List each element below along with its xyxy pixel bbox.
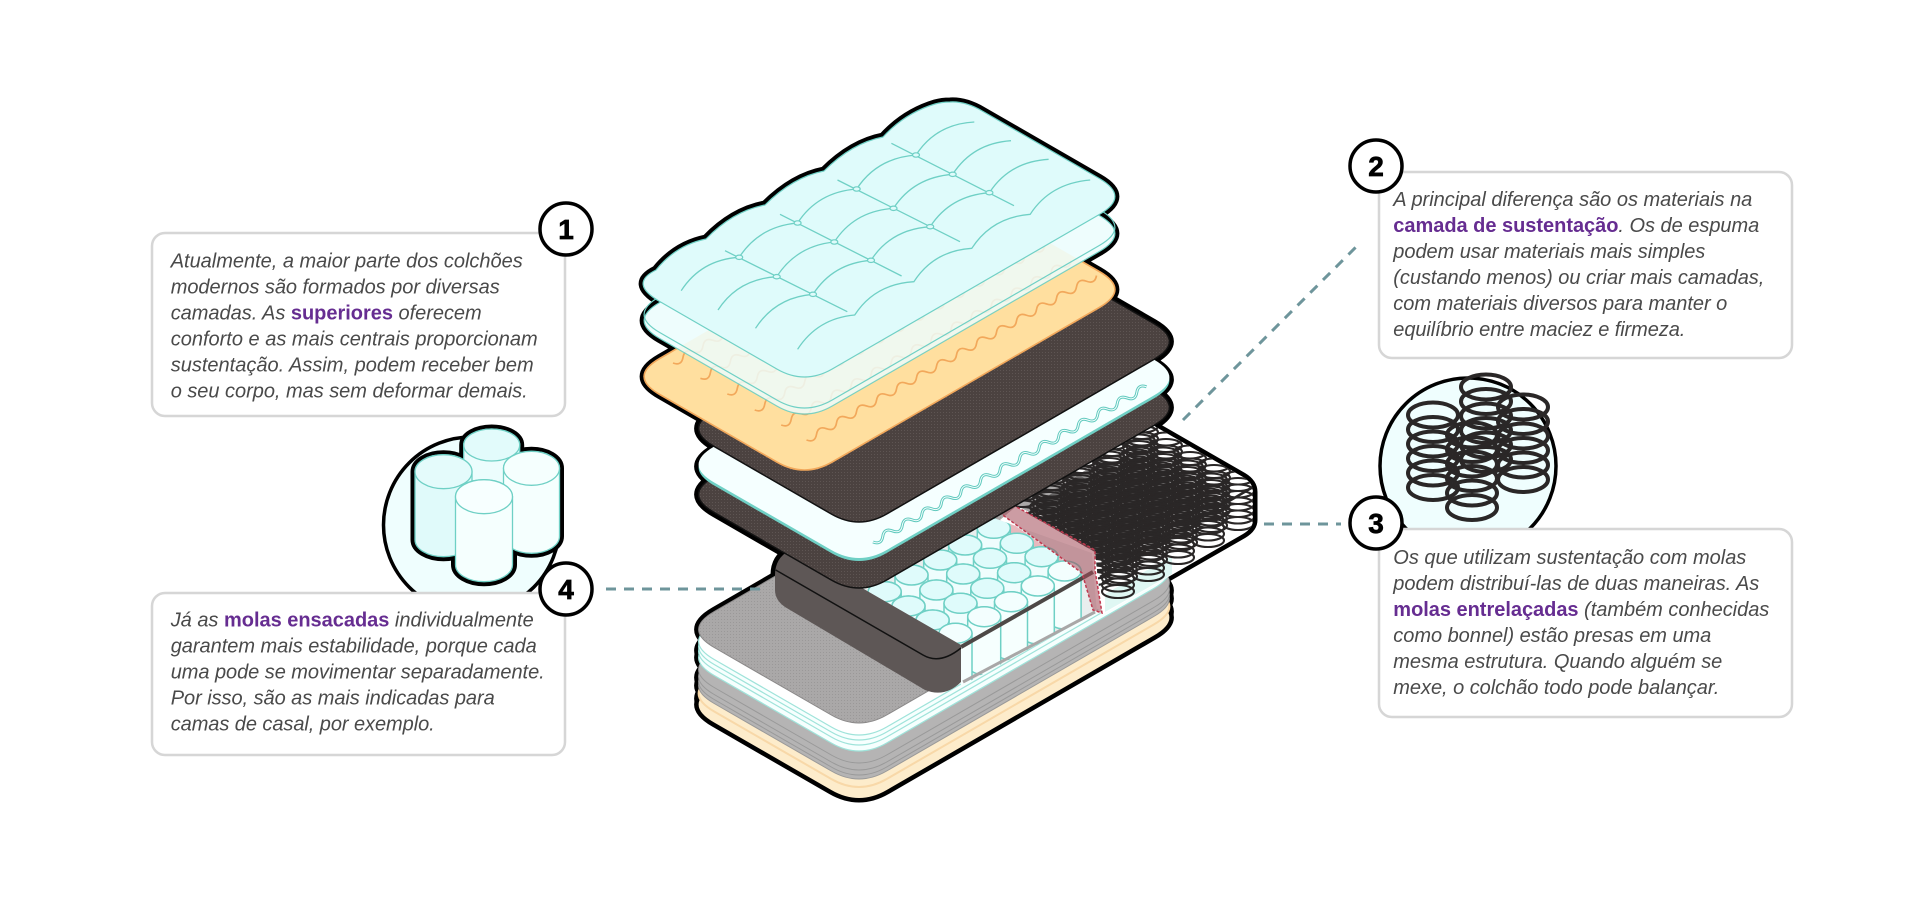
panel 3: mesma estrutura. Quando alguém se bbox=[1393, 651, 1722, 673]
quilted top layer bbox=[643, 102, 1115, 377]
panel 4: Já as molas ensacadas individualmente bbox=[170, 610, 534, 632]
panel 2: A principal diferença são os materiais na bbox=[1392, 189, 1752, 211]
panel 1: sustentação. Assim, podem receber bem bbox=[171, 355, 534, 377]
translucent comfort layer bbox=[644, 212, 1116, 415]
panel 2: podem usar materiais mais simples bbox=[1392, 241, 1705, 263]
number badge 1: 1 bbox=[558, 214, 574, 245]
panel 1: camadas. As superiores oferecem bbox=[171, 303, 482, 325]
bottom mattress layers stack bbox=[699, 449, 1169, 798]
panel 4: Por isso, são as mais indicadas para bbox=[171, 688, 495, 710]
pocket block base and top edge bbox=[961, 572, 1095, 682]
panel 4 bbox=[152, 593, 565, 755]
leader line 3 bbox=[1264, 522, 1341, 526]
panel 1 bbox=[152, 233, 565, 416]
illustration: pocket springs in circle bbox=[384, 429, 560, 613]
number badge 3: 3 bbox=[1368, 508, 1384, 539]
upper dark layer bbox=[699, 248, 1169, 522]
leader line 2 bbox=[1183, 245, 1358, 420]
number badge 2 bbox=[1350, 140, 1402, 192]
lower dark support layer bbox=[699, 314, 1169, 588]
number badge 4 bbox=[540, 563, 592, 615]
panel 2 bbox=[1379, 172, 1792, 358]
number badge 1 bbox=[540, 203, 592, 255]
white foam layer with wavy line bbox=[699, 284, 1169, 561]
spring block body bbox=[1000, 410, 1253, 615]
interlaced bonnell springs bbox=[1006, 420, 1254, 598]
pocket springs bbox=[862, 515, 1097, 691]
panel 2: equilíbrio entre maciez e firmeza. bbox=[1393, 319, 1685, 341]
leader line 4 bbox=[606, 588, 768, 590]
illustration: interlaced springs in circle bbox=[1380, 374, 1556, 554]
panel 3: Os que utilizam sustentação com molas bbox=[1393, 547, 1746, 569]
panel 4: garantem mais estabilidade, porque cada bbox=[171, 636, 537, 658]
panel 2: com materiais diversos para manter o bbox=[1393, 293, 1727, 315]
panel 3: podem distribuí-las de duas maneiras. As bbox=[1392, 573, 1759, 595]
panel 3: molas entrelaçadas (também conhecidas bbox=[1393, 599, 1769, 621]
red translucent divider band bbox=[1000, 505, 1102, 613]
number badge 2: 2 bbox=[1368, 151, 1384, 182]
panel 3: mexe, o colchão todo pode balançar. bbox=[1393, 677, 1719, 699]
panel 2: (custando menos) ou criar mais camadas, bbox=[1393, 267, 1764, 289]
panel 1: conforto e as mais centrais proporcionam bbox=[171, 329, 538, 351]
silhouette outline of the whole mattress stack bbox=[643, 102, 1253, 798]
panel 3 bbox=[1379, 529, 1792, 717]
panel 3: como bonnel) estão presas em uma bbox=[1393, 625, 1711, 647]
panel 2: camada de sustentação. Os de espuma bbox=[1393, 215, 1759, 237]
dark foam wrap bbox=[775, 530, 961, 693]
panel 4: uma pode se movimentar separadamente. bbox=[171, 662, 545, 684]
panel 1: o seu corpo, mas sem deformar demais. bbox=[171, 381, 528, 403]
number badge 3 bbox=[1350, 497, 1402, 549]
panel 4: camas de casal, por exemplo. bbox=[171, 714, 435, 736]
panel 1: modernos são formados por diversas bbox=[171, 277, 500, 299]
panel 1: Atualmente, a maior parte dos colchões bbox=[170, 251, 523, 273]
orange foam layer with waves bbox=[644, 196, 1115, 470]
number badge 4: 4 bbox=[558, 574, 574, 605]
